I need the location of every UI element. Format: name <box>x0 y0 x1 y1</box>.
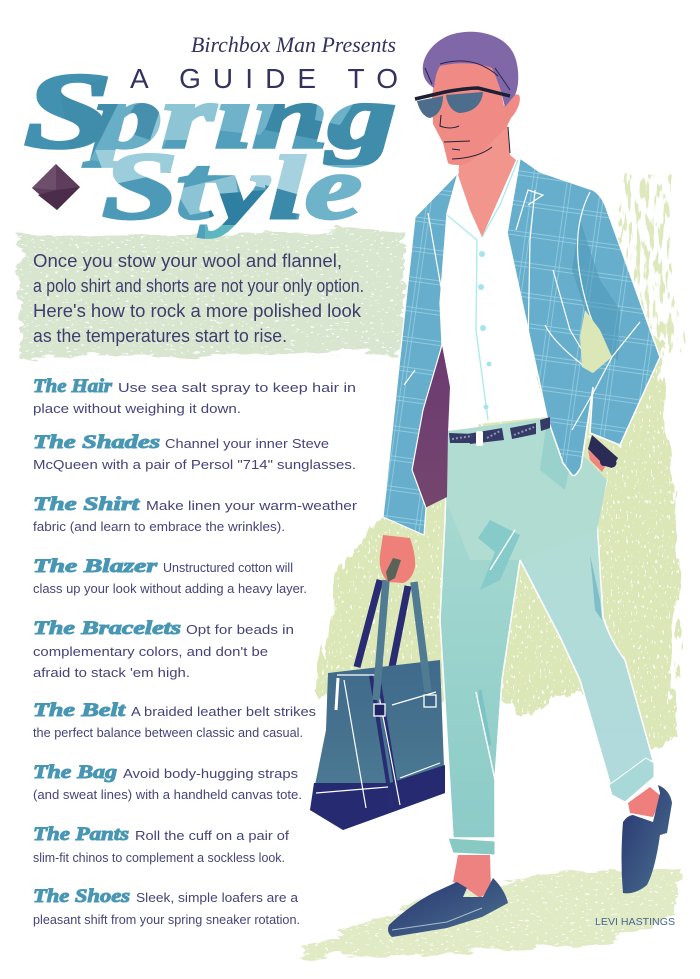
item: the blazer: The Blazer <box>33 556 158 577</box>
intro text <box>33 250 364 346</box>
item: the bracelets: Opt for beads in <box>186 622 294 637</box>
item: the shoes: pleasant shift from your spring sneaker rotation. <box>33 912 300 927</box>
item: the hair: Use sea salt spray to keep hair in <box>118 380 356 395</box>
byline: Birchbox Man Presents <box>191 32 396 57</box>
item: the pants <box>33 824 289 865</box>
title word: Spring: pring <box>83 68 396 167</box>
signature: LEVI HASTINGS <box>595 917 675 928</box>
item: the shirt <box>33 494 358 534</box>
item: the shades: The Shades <box>33 432 160 453</box>
front shoe <box>388 878 508 937</box>
blazer seams <box>404 190 640 430</box>
bag straps front <box>376 580 428 700</box>
item: the shades: Channel your inner Steve <box>165 436 329 451</box>
item: the bracelets: complementary colors, and don't be <box>33 644 268 659</box>
bag <box>310 580 445 830</box>
front leg <box>440 425 530 838</box>
item: the bag: Avoid body-hugging straps <box>123 766 299 781</box>
right blazer panel <box>507 158 660 476</box>
item: the bracelets: afraid to stack 'em high. <box>33 665 190 680</box>
green brush behind figure <box>315 320 678 750</box>
item: the bag: The Bag <box>33 762 117 783</box>
title word: Style: tyle <box>176 139 362 238</box>
item: the bracelets <box>33 618 294 680</box>
icon: purple gem <box>32 164 80 210</box>
purple lining <box>412 345 450 508</box>
shirt <box>440 160 547 427</box>
item: the pants: slim-fit chinos to complement a sockless look. <box>33 850 285 865</box>
green brush ground <box>300 868 680 958</box>
back cuff <box>609 758 654 802</box>
item: the belt: The Belt <box>33 700 126 721</box>
item: the bag <box>33 762 302 802</box>
item: the blazer: class up your look without adding a heavy layer. <box>33 581 307 596</box>
arm gap <box>580 310 612 373</box>
facial features <box>440 115 510 159</box>
sunglasses <box>415 88 510 118</box>
face <box>432 61 520 165</box>
item: the bag: (and sweat lines) with a handheld canvas tote. <box>33 787 302 802</box>
item: the shirt: fabric (and learn to embrace the wrinkles). <box>33 519 285 534</box>
illustration: man walking <box>310 32 672 937</box>
pocket hand and bracelets <box>588 435 618 472</box>
hair <box>423 32 518 107</box>
item: the belt: A braided leather belt strikes <box>131 704 317 719</box>
item: the belt <box>33 700 317 740</box>
blazer shading <box>572 220 620 360</box>
intro text: as the temperatures start to rise. <box>33 325 287 346</box>
heading: a guide to: A GUIDE TO <box>130 63 398 94</box>
intro text: Here's how to rock a more polished look <box>33 300 362 321</box>
title: spring style <box>24 74 396 239</box>
back shoe <box>622 785 672 893</box>
bag base <box>310 765 445 830</box>
item: the shoes: The Shoes <box>33 886 130 907</box>
item: the blazer <box>33 556 307 596</box>
back ankle <box>628 787 662 817</box>
item: the belt: the perfect balance between classic and casual. <box>33 725 303 740</box>
left blazer panel <box>383 173 458 535</box>
item: the shades <box>33 432 356 472</box>
hand <box>380 535 415 583</box>
bag straps back <box>357 580 408 667</box>
item: the shoes <box>33 886 300 927</box>
item: the pants: Roll the cuff on a pair of <box>135 828 289 843</box>
item: the blazer: Unstructured cotton will <box>163 560 293 575</box>
item: the shades: McQueen with a pair of Persol "714" sunglasses. <box>33 457 356 472</box>
front ankle <box>453 855 491 898</box>
item: the hair: The Hair <box>33 376 113 397</box>
intro text: Once you stow your wool and flannel, <box>33 250 342 271</box>
sparse brush top right <box>610 175 680 360</box>
item: the pants: The Pants <box>33 824 129 845</box>
pants hip <box>446 418 607 560</box>
bag body <box>310 660 445 830</box>
intro brush panel <box>20 230 404 358</box>
intro text: a polo shirt and shorts are not your only option. <box>33 275 364 296</box>
title word: Style: S <box>102 132 178 239</box>
item: the shirt: The Shirt <box>33 494 140 515</box>
item: the shoes: Sleek, simple loafers are a <box>136 890 299 905</box>
item: the hair: place without weighing it down. <box>33 401 241 416</box>
item: the bracelets: The Bracelets <box>33 618 181 639</box>
item: the shirt: Make linen your warm-weather <box>146 498 358 513</box>
neck <box>458 122 516 237</box>
back leg <box>520 470 653 787</box>
item: the hair <box>33 376 356 416</box>
title word: Spring: S <box>24 52 112 171</box>
belt <box>449 417 550 446</box>
front cuff <box>448 838 495 855</box>
